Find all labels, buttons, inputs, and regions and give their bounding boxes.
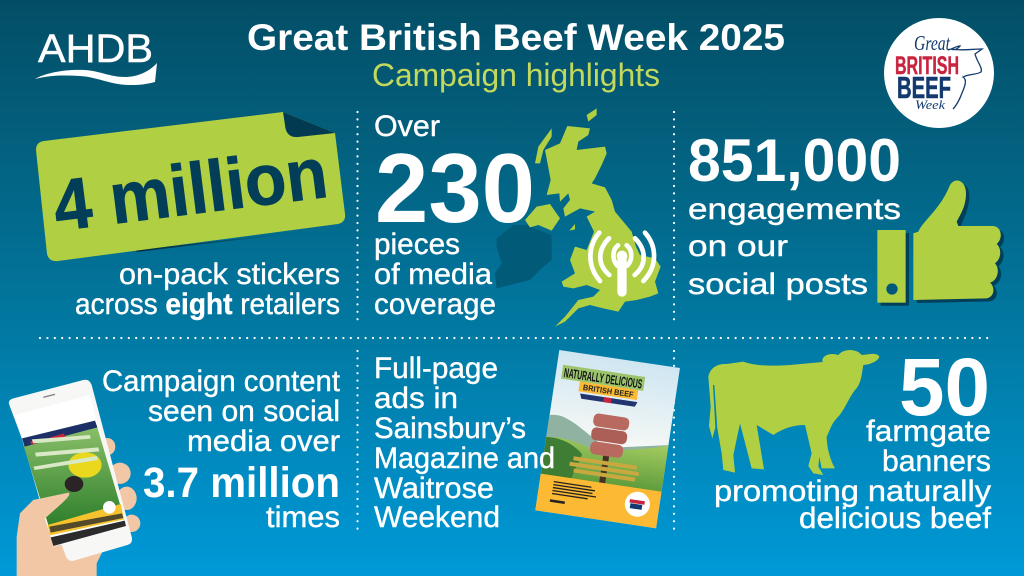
panel: media coverage xyxy=(374,108,661,327)
engagements text xyxy=(688,127,901,301)
title: Great British Beef Week 2025 xyxy=(247,17,785,58)
reach text: seen on social xyxy=(148,395,340,428)
ads text: ads in xyxy=(374,382,458,415)
ads text: Weekend xyxy=(374,501,500,534)
advert page: BRITISH BEEF xyxy=(582,383,634,399)
reach text: Campaign content xyxy=(102,365,340,398)
advert page: NATURALLY DELICIOUS xyxy=(563,365,643,392)
engagements text: social posts xyxy=(688,268,868,301)
sticker caption: on-pack stickers xyxy=(119,258,340,291)
banners text: promoting naturally xyxy=(714,475,991,508)
sticker: 4 million xyxy=(49,133,332,247)
banners text: 50 xyxy=(899,342,990,433)
ads text: Full-page xyxy=(374,352,498,385)
sticker caption: across eight retailers xyxy=(75,288,340,321)
icon: cow silhouette xyxy=(708,350,879,475)
reach text: media over xyxy=(187,425,340,458)
over 230 text: Over xyxy=(374,110,440,143)
badge: Great British Beef Week xyxy=(884,18,994,128)
ads text: Sainsbury’s xyxy=(374,412,526,445)
icon: thumbs up xyxy=(877,180,1004,306)
banners text xyxy=(714,342,992,535)
reach text: times xyxy=(266,501,340,534)
reach text: 3.7 million xyxy=(143,459,340,507)
panel: social engagements xyxy=(688,127,1004,306)
AHDB logo xyxy=(35,27,157,85)
badge: Great British Beef Week: BRITISH xyxy=(895,52,959,80)
icon: hand holding phone xyxy=(9,380,140,576)
badge: Great British Beef Week: BEEF xyxy=(897,70,951,105)
AHDB logo: AHDB xyxy=(38,27,153,71)
banners text: banners xyxy=(882,445,991,478)
over 230 text xyxy=(374,110,535,321)
panel: social media reach xyxy=(9,365,340,576)
panel: 4 million stickers xyxy=(36,112,345,321)
badge: Great British Beef Week: Great xyxy=(914,31,951,55)
reach text xyxy=(102,365,340,534)
engagements text: on our xyxy=(688,230,788,263)
advert page xyxy=(535,350,680,528)
over 230 text: of media xyxy=(374,258,493,291)
subtitle: Campaign highlights xyxy=(372,57,660,93)
sticker caption xyxy=(75,258,340,321)
panel: full-page ads xyxy=(374,350,680,534)
map of UK and Ireland xyxy=(495,108,661,327)
panel: farmgate banners xyxy=(708,342,992,535)
engagements text: 851,000 xyxy=(688,127,901,194)
ads text: Magazine and xyxy=(374,442,555,475)
ads text: Waitrose xyxy=(374,472,494,505)
banners text: farmgate xyxy=(866,415,991,448)
engagements text: engagements xyxy=(688,193,901,226)
banners text: delicious beef xyxy=(799,502,992,535)
over 230 text: 230 xyxy=(375,133,535,243)
over 230 text: coverage xyxy=(374,288,496,321)
dotted dividers xyxy=(40,112,992,535)
badge: Great British Beef Week: Week xyxy=(915,97,945,112)
ads text xyxy=(374,352,555,534)
over 230 text: pieces xyxy=(374,228,460,261)
